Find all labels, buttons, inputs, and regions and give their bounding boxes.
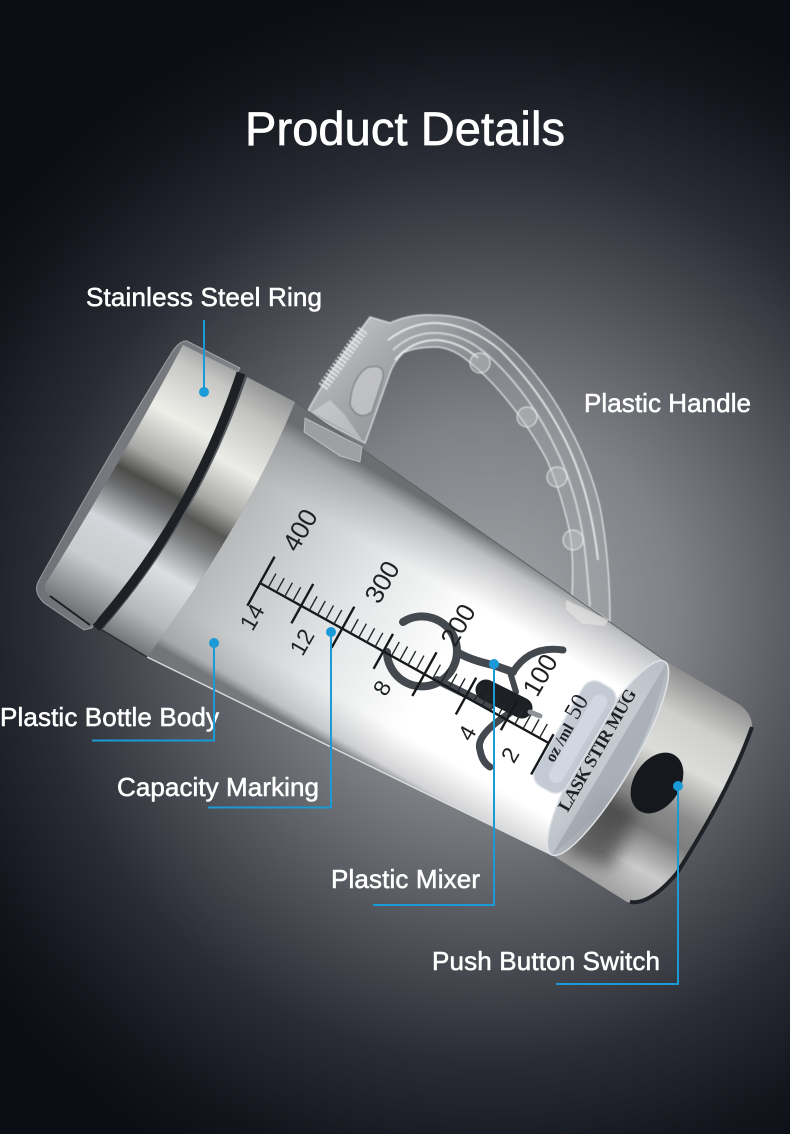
handle studs [470,353,490,373]
mixer base disc [529,649,686,867]
scale numbers [234,504,564,767]
rubber band [96,373,241,628]
grip ridges [323,330,363,387]
label: Push Button Switch: Push Button Switch [432,946,660,976]
stainless steel ring [36,341,295,657]
mug lettering: oz /ml [542,720,578,765]
scale numbers: 12 [284,624,320,660]
label: Capacity Marking: Capacity Marking [117,772,319,802]
label: Stainless Steel Ring: Stainless Steel Ring [86,282,322,312]
label: Stainless Steel Ring [86,282,322,397]
label: Capacity Marking [117,627,336,808]
scale numbers: 100 [516,649,564,701]
plastic mixer [387,616,563,767]
scale numbers: 14 [234,599,270,635]
steel base [552,662,752,902]
title: Product Details [245,102,565,155]
handle mounts [304,418,362,462]
scale numbers: 4 [453,721,482,745]
label: Plastic Bottle Body: Plastic Bottle Body [0,702,219,732]
finger loop [350,366,383,416]
scale numbers: 8 [368,676,396,700]
label: Plastic Handle: Plastic Handle [584,388,751,418]
label: Plastic Bottle Body [0,638,219,740]
scale numbers: 200 [434,599,482,651]
label: Plastic Mixer: Plastic Mixer [331,864,480,894]
mug lettering: 50 [560,690,594,724]
scale numbers: 300 [358,556,406,608]
icon: bottle product illustration [36,315,752,902]
capacity marking scale [243,557,563,774]
scale numbers: 2 [496,743,524,767]
mug lettering: LASK STIR MUG [554,685,640,815]
scale numbers: 400 [276,504,324,556]
plastic bottle body [147,402,667,855]
label: Plastic Mixer [331,659,499,905]
plastic handle [307,315,610,622]
label: Push Button Switch [432,781,683,984]
icon: push button [620,743,694,823]
